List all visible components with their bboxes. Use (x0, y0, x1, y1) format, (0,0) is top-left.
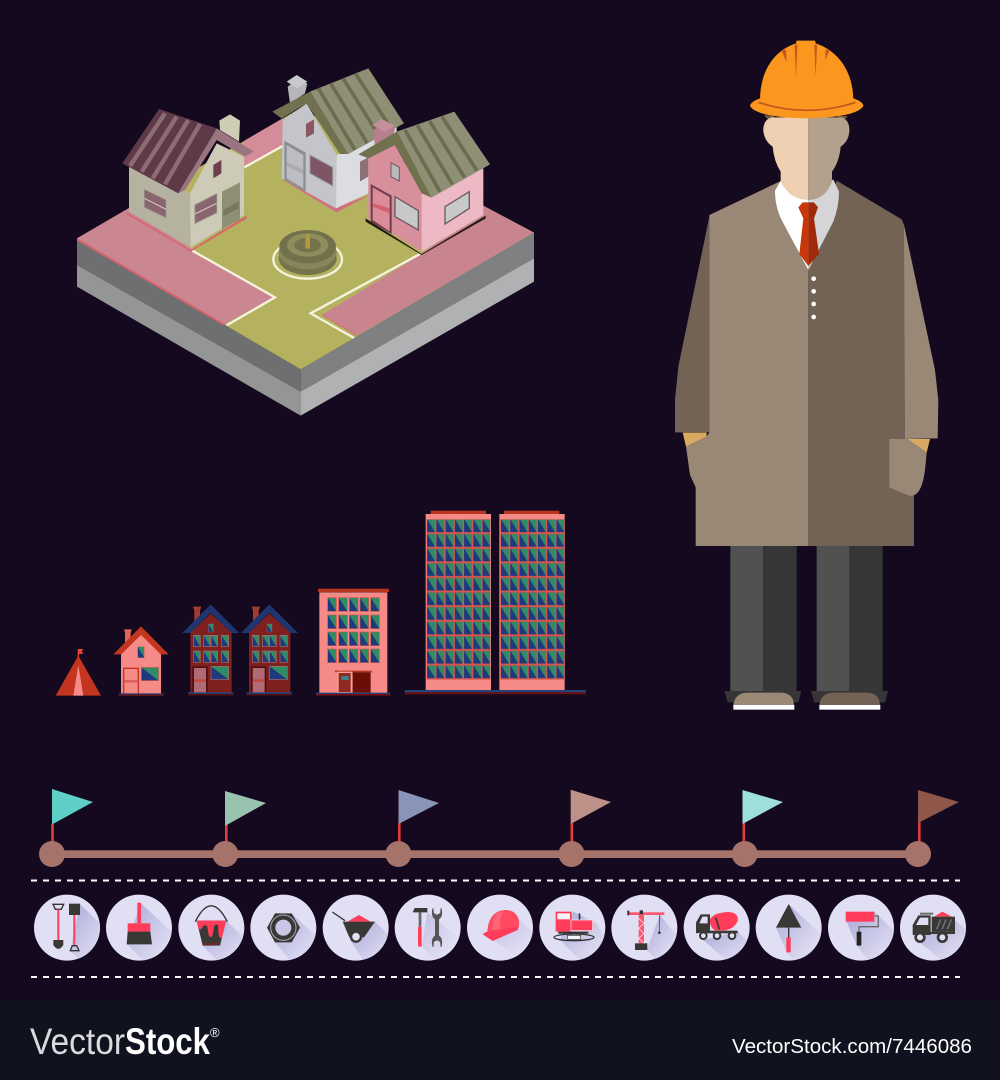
footer image id: VectorStock.com/7446086 (732, 1036, 972, 1058)
hard hat (750, 41, 863, 118)
timeline with flags (39, 789, 959, 867)
house: cream left (122, 109, 254, 252)
icon: dump truck (900, 894, 966, 961)
icon: paint roller (828, 894, 894, 961)
icon: safety helmet (467, 895, 537, 961)
icon: paint bucket (178, 894, 244, 961)
shirt collar (775, 179, 839, 270)
twin towers (405, 511, 586, 694)
small house (113, 626, 169, 696)
house: back grey (272, 68, 404, 212)
icon: concrete mixer (684, 894, 750, 961)
icon: tower crane (611, 895, 680, 963)
timeline bar (52, 850, 918, 858)
flag 3 (385, 790, 439, 867)
icon: trowel (756, 895, 823, 967)
flag 1 (39, 789, 93, 867)
footer bar (0, 1000, 1000, 1080)
icon: shovels (34, 894, 100, 961)
head (763, 115, 849, 200)
flag 5 (732, 790, 783, 867)
icon: wheelbarrow (322, 894, 389, 961)
brick house A (182, 604, 239, 696)
flag 6 (905, 790, 959, 867)
footer logo: Vector (30, 1021, 125, 1062)
brick house B (241, 604, 298, 696)
tent (56, 649, 101, 696)
ground base (77, 108, 534, 416)
icon: brush (106, 894, 172, 961)
engineer figure (675, 41, 938, 710)
footer logo bold part: Stock (125, 1021, 210, 1062)
isometric neighbourhood block (77, 68, 534, 416)
house: pink right (358, 112, 490, 255)
fountain (279, 230, 337, 275)
left sleeve (675, 217, 709, 432)
trousers (730, 546, 883, 692)
left hand (683, 433, 707, 447)
registered mark: ® (210, 1025, 220, 1040)
flag 2 (212, 791, 266, 867)
icon: hammer and wrench (395, 895, 461, 961)
right sleeve (904, 225, 938, 439)
coat buttons (811, 276, 816, 319)
coat right half (808, 181, 914, 546)
coat left half (686, 182, 808, 546)
shoes (724, 691, 888, 710)
building size row (56, 511, 586, 696)
pink pavements (77, 118, 534, 336)
right hand (907, 439, 930, 453)
icon: crawler machine (539, 894, 606, 961)
office block (316, 589, 390, 696)
white path lines (192, 146, 420, 338)
tool icon row (34, 894, 966, 961)
tie (798, 202, 819, 266)
icon: hex nut (250, 894, 316, 961)
flag 4 (558, 790, 611, 867)
pocket (889, 439, 927, 496)
